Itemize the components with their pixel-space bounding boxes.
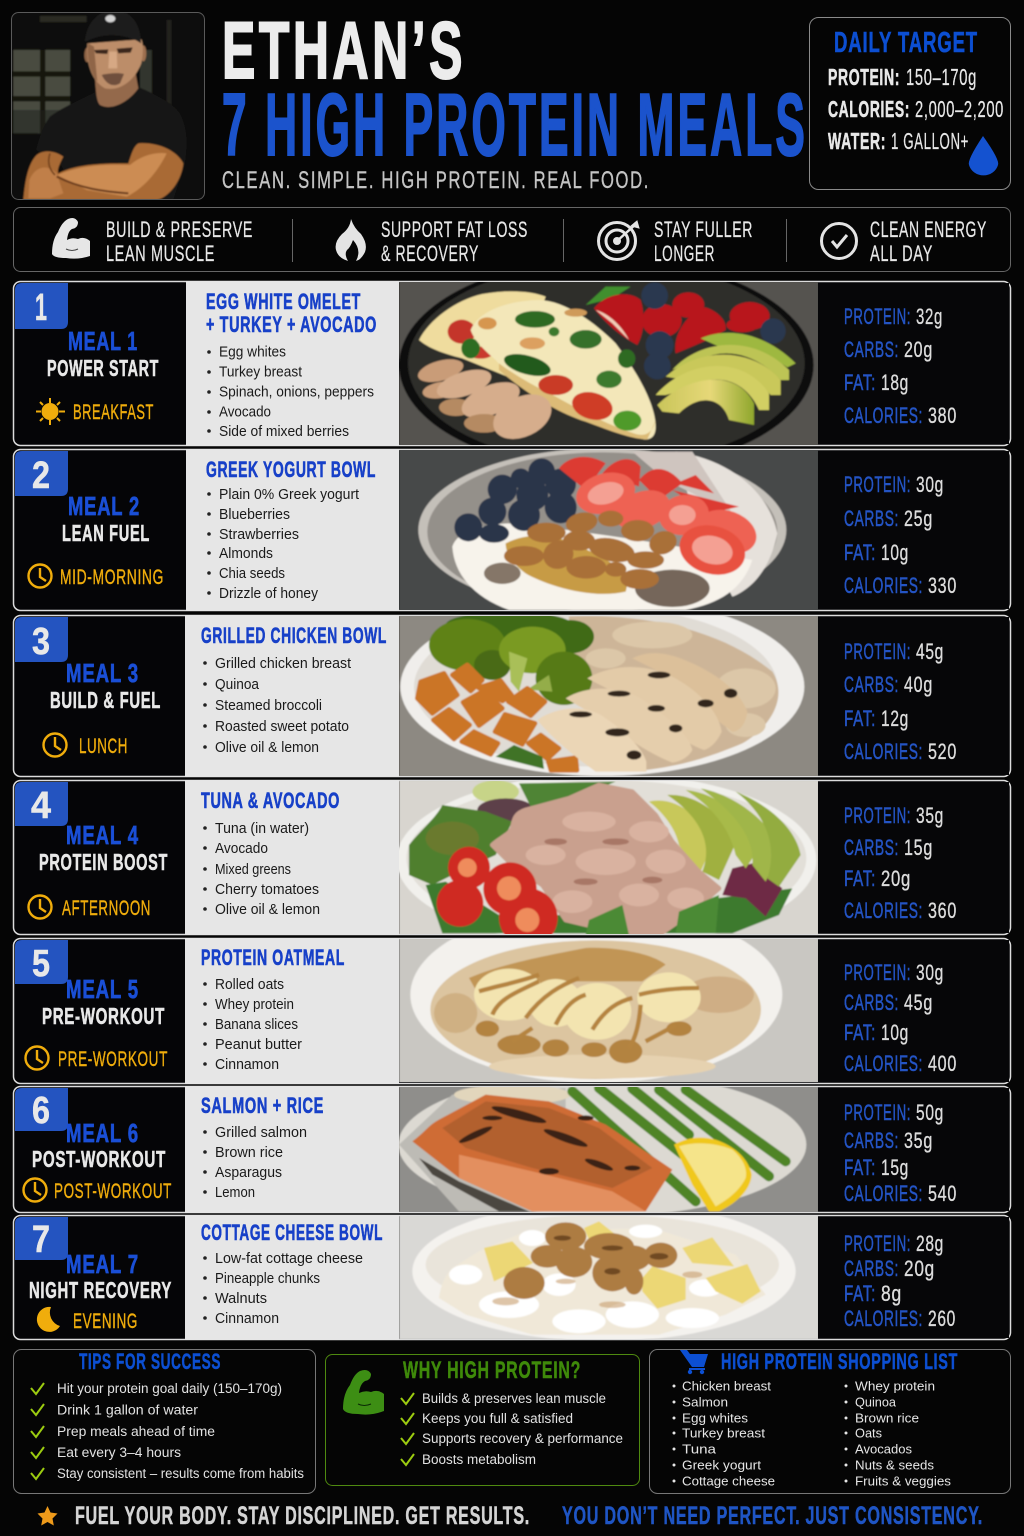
meal 3 macros: 40g	[904, 672, 933, 697]
meal 4 dish text: TUNA & AVOCADO	[201, 788, 340, 813]
benefit: muscle text: LEAN MUSCLE	[106, 241, 215, 266]
meal 3 dish text	[201, 623, 387, 756]
why checklist: Builds & preserves lean muscle	[422, 1391, 606, 1406]
meal 3 macros: 520	[928, 739, 957, 764]
benefit: fuller text: LONGER	[654, 241, 715, 266]
meal 5 dish text: Whey protein	[215, 997, 294, 1013]
shopping column 2: Quinoa	[855, 1394, 897, 1410]
meal 2 labels: MID-MORNING	[60, 566, 164, 589]
meal 2 macros: 10g	[881, 540, 909, 565]
meal 4 macros: CALORIES:	[844, 898, 923, 923]
meal 1 labels: POWER START	[47, 355, 159, 381]
meal 5 number badge: 5	[32, 943, 50, 985]
meal 3 dish text: GRILLED CHICKEN BOWL	[201, 623, 387, 648]
food photo: chicken bowl	[399, 616, 818, 776]
meal 6 dish text: Brown rice	[215, 1145, 283, 1161]
panel: why high protein	[326, 1354, 640, 1486]
panel: daily target: PROTEIN:	[828, 64, 900, 90]
meal 4 macros	[818, 782, 1009, 933]
meal 2 dish text: Chia seeds	[219, 566, 285, 582]
meal 7 labels: NIGHT RECOVERY	[29, 1277, 172, 1303]
meal 5 labels: PRE-WORKOUT	[58, 1048, 168, 1071]
meal 2 dish text: GREEK YOGURT BOWL	[206, 457, 376, 482]
meal 3 macros: CALORIES:	[844, 739, 923, 764]
meal 3 labels: MEAL 3	[66, 658, 139, 688]
panel: tips for success	[14, 1349, 316, 1494]
meal 7 macros: 260	[928, 1306, 956, 1331]
subtitle: CLEAN. SIMPLE. HIGH PROTEIN. REAL FOOD.	[222, 167, 650, 194]
icon: star	[38, 1506, 58, 1526]
tips checklist: Stay consistent – results come from habits	[57, 1466, 304, 1481]
why checklist: Keeps you full & satisfied	[422, 1411, 573, 1426]
food photo: omelet plate	[399, 282, 818, 445]
meal 6 labels: POST-WORKOUT	[32, 1146, 166, 1172]
meal 2 macros: CARBS:	[844, 506, 899, 531]
meal 3 macros	[818, 617, 1009, 775]
meal 4 dish text: Cherry tomatoes	[215, 882, 319, 898]
meal 7 labels: MEAL 7	[66, 1249, 139, 1279]
meal 4 number badge: 4	[31, 785, 51, 827]
benefit: energy text	[870, 217, 987, 266]
meal 2 macros: 25g	[904, 506, 933, 531]
meal 5 labels	[42, 974, 168, 1071]
meal 1 labels	[47, 326, 159, 424]
meal 4 labels	[39, 820, 168, 920]
meal 5 dish text: PROTEIN OATMEAL	[201, 945, 345, 970]
meal 7 macros: 28g	[916, 1231, 944, 1256]
meal 5 labels: MEAL 5	[66, 974, 139, 1004]
panel: meal 1	[12, 280, 1012, 446]
panel: daily target: 150–170g	[906, 64, 977, 90]
food photo: yogurt bowl	[399, 448, 819, 613]
meal 3 labels: BUILD & FUEL	[50, 687, 161, 713]
photo: Ethan portrait	[11, 11, 205, 200]
meal 1 macros: PROTEIN:	[844, 304, 911, 329]
shopping column 1	[672, 1378, 775, 1488]
shopping column 1: Cottage cheese	[682, 1474, 775, 1488]
meal 5 dish text: Rolled oats	[215, 977, 284, 993]
shopping column 2: Whey protein	[855, 1378, 935, 1394]
meal 3 labels	[50, 658, 161, 758]
meal 1 macros: 32g	[916, 304, 943, 329]
meal 1 dish text: + TURKEY + AVOCADO	[206, 312, 377, 337]
meal 7 macros: PROTEIN:	[844, 1231, 911, 1256]
icon: flame	[336, 219, 366, 261]
panel: meal 4	[14, 773, 1010, 947]
panel: daily target: 1 GALLON+	[891, 128, 969, 154]
title: Ethan's: ETHAN’S	[222, 6, 466, 96]
meal 4 dish text: Tuna (in water)	[215, 821, 309, 837]
meal 1 macros: CALORIES:	[844, 403, 923, 428]
meal 4 macros: PROTEIN:	[844, 803, 911, 828]
meal 7 macros: FAT:	[844, 1281, 876, 1306]
shopping column 1: Egg whites	[682, 1410, 749, 1426]
meal 5 macros: 45g	[904, 990, 933, 1015]
icon: clock	[44, 734, 66, 756]
panel: why high protein: WHY HIGH PROTEIN?	[403, 1357, 581, 1384]
meal 6 dish text: Grilled salmon	[215, 1125, 307, 1141]
meal 7 macros: 20g	[904, 1256, 935, 1281]
shopping column 1: Salmon	[682, 1394, 728, 1410]
meal 2 labels: LEAN FUEL	[62, 520, 150, 546]
meal 5 number badge	[15, 940, 68, 985]
meal 2 macros: PROTEIN:	[844, 472, 911, 497]
shopping column 1: Chicken breast	[682, 1378, 771, 1394]
meal 4 dish text	[201, 788, 340, 918]
meal 2 macros: 330	[928, 573, 957, 598]
meal 2 labels: MEAL 2	[68, 491, 140, 521]
shopping column 2: Nuts & seeds	[855, 1458, 934, 1472]
meal 7 macros	[818, 1217, 1009, 1338]
meal 4 labels: AFTERNOON	[62, 897, 151, 920]
meal 7 dish text: Pineapple chunks	[215, 1271, 320, 1287]
shopping column 1: Tuna	[682, 1442, 717, 1456]
meal 3 dish text: Olive oil & lemon	[215, 740, 319, 756]
meal 5 labels: PRE-WORKOUT	[42, 1003, 165, 1029]
meal 7 macros: 8g	[881, 1281, 902, 1306]
panel: benefits strip	[14, 208, 1010, 272]
icon: clock	[28, 564, 52, 588]
meal 7 labels: EVENING	[73, 1310, 138, 1333]
meal 2 macros	[818, 451, 1009, 609]
panel: meal 6	[12, 1086, 1012, 1214]
icon: water drop	[969, 136, 998, 175]
tips checklist	[31, 1381, 304, 1481]
meal 6 macros	[818, 1088, 1009, 1211]
meal 4 macros: 20g	[881, 866, 911, 891]
meal 1 dish text: Turkey breast	[219, 364, 302, 380]
meal 7 number badge	[15, 1217, 68, 1261]
panel: meal 5	[12, 938, 1012, 1084]
shopping column 1: Greek yogurt	[682, 1458, 761, 1472]
meal 3 number badge	[15, 617, 68, 663]
icon: sun	[36, 398, 65, 425]
meal 4 labels: MEAL 4	[66, 820, 139, 850]
meal 6 number badge: 6	[32, 1090, 50, 1132]
panel: daily target: WATER:	[828, 128, 886, 154]
icon: moon	[37, 1307, 60, 1332]
meal 4 macros: CARBS:	[844, 835, 899, 860]
meal 6 labels	[32, 1118, 172, 1203]
benefit: fuller text: STAY FULLER	[654, 217, 753, 242]
icon: check circle	[822, 224, 856, 258]
meal 4 labels: PROTEIN BOOST	[39, 849, 168, 875]
meal 3 dish text: Roasted sweet potato	[215, 719, 349, 735]
meal 1 labels: MEAL 1	[68, 326, 138, 356]
meal 1 macros: CARBS:	[844, 337, 899, 362]
food photo: tuna avocado bowl	[399, 781, 818, 934]
divider	[292, 219, 293, 262]
shopping column 2: Brown rice	[855, 1410, 919, 1426]
benefit: fat loss text: SUPPORT FAT LOSS	[381, 217, 528, 242]
panel: meal 2	[14, 448, 1010, 613]
meal 1 dish text	[206, 289, 377, 440]
meal 1 macros: FAT:	[844, 370, 876, 395]
food photo: salmon plate	[399, 1087, 818, 1212]
benefit: muscle text	[106, 217, 253, 266]
panel: daily target: CALORIES:	[828, 96, 910, 122]
meal 5 dish text: Peanut butter	[215, 1037, 302, 1053]
meal 4 macros: 35g	[916, 803, 944, 828]
tips checklist: Eat every 3–4 hours	[57, 1445, 181, 1460]
meal 5 dish text	[201, 945, 345, 1073]
benefit: fuller text	[654, 217, 753, 266]
meal 4 number badge	[15, 782, 68, 827]
meal 5 dish text: Cinnamon	[215, 1057, 279, 1073]
meal 1 dish text: Side of mixed berries	[219, 424, 349, 440]
meal 6 dish text: Lemon	[215, 1185, 255, 1201]
shopping column 2: Oats	[855, 1426, 882, 1440]
divider	[786, 219, 787, 262]
meal 1 macros: 380	[928, 403, 957, 428]
meal 1 labels: BREAKFAST	[73, 401, 154, 424]
meal 3 macros: 12g	[881, 706, 909, 731]
panel: meal 3	[14, 597, 1010, 778]
icon: target	[598, 221, 639, 260]
shopping column 2: Avocados	[855, 1442, 912, 1456]
food photo: oatmeal bowl	[399, 939, 818, 1082]
panel: tips for success: TIPS FOR SUCCESS	[79, 1349, 221, 1374]
meal 6 dish text	[201, 1093, 324, 1201]
meal 4 macros: FAT:	[844, 866, 876, 891]
meal 4 dish text: Avocado	[215, 841, 268, 857]
meal 5 macros	[818, 940, 1009, 1082]
benefit: energy text: ALL DAY	[870, 241, 933, 266]
meal 3 dish text: Quinoa	[215, 677, 260, 693]
meal 1 number badge	[15, 283, 68, 329]
meal 7 macros: CALORIES:	[844, 1306, 923, 1331]
meal 1 dish text: Avocado	[219, 404, 271, 420]
meal 6 macros: CALORIES:	[844, 1181, 923, 1206]
why checklist: Supports recovery & performance	[422, 1431, 623, 1446]
icon: shopping cart	[680, 1350, 708, 1374]
icon: green flexed arm	[343, 1370, 384, 1415]
why checklist: Boosts metabolism	[422, 1452, 536, 1467]
meal 3 macros: CARBS:	[844, 672, 899, 697]
food photo: cottage cheese bowl	[399, 1216, 818, 1339]
why checklist	[401, 1391, 623, 1467]
meal 5 dish text: Banana slices	[215, 1017, 298, 1033]
meal 2 macros: FAT:	[844, 540, 876, 565]
meal 5 macros: FAT:	[844, 1020, 876, 1045]
meal 2 number badge: 2	[32, 455, 50, 497]
meal 5 macros: 10g	[881, 1020, 909, 1045]
meal 2 dish text: Blueberries	[219, 507, 290, 523]
benefit: muscle text: BUILD & PRESERVE	[106, 217, 253, 242]
meal 4 dish text: Olive oil & lemon	[215, 902, 320, 918]
icon: clock	[24, 1178, 46, 1202]
benefit: fat loss text: & RECOVERY	[381, 241, 479, 266]
meal 6 macros: PROTEIN:	[844, 1100, 911, 1125]
meal 5 macros: 400	[928, 1051, 957, 1076]
meal 5 macros: PROTEIN:	[844, 960, 911, 985]
meal 6 macros: FAT:	[844, 1155, 876, 1180]
meal 3 dish text: Grilled chicken breast	[215, 656, 351, 672]
meal 6 macros: 35g	[904, 1128, 933, 1153]
meal 5 macros: 30g	[916, 960, 944, 985]
meal 2 dish text: Almonds	[219, 546, 273, 562]
meal 7 macros: CARBS:	[844, 1256, 899, 1281]
meal 6 dish text: Asparagus	[215, 1165, 282, 1181]
meal 6 number badge	[15, 1088, 68, 1132]
panel: shopping list	[650, 1349, 1010, 1494]
meal 5 macros: CARBS:	[844, 990, 899, 1015]
meal 6 macros: 15g	[881, 1155, 909, 1180]
meal 7 dish text: Cinnamon	[215, 1311, 279, 1327]
meal 7 dish text	[201, 1220, 383, 1327]
meal 1 dish text: Spinach, onions, peppers	[219, 384, 374, 400]
meal 3 macros: PROTEIN:	[844, 639, 911, 664]
meal 3 labels: LUNCH	[79, 735, 128, 758]
meal 2 number badge	[15, 451, 68, 497]
meal 4 macros: 360	[928, 898, 957, 923]
meal 1 dish text: Egg whites	[219, 344, 286, 360]
divider	[563, 219, 564, 262]
shopping column 1: Turkey breast	[682, 1426, 765, 1440]
meal 2 macros: CALORIES:	[844, 573, 923, 598]
shopping column 2: Fruits & veggies	[855, 1474, 952, 1488]
meal 7 dish text: Low-fat cottage cheese	[215, 1251, 363, 1267]
meal 6 labels: POST-WORKOUT	[54, 1180, 172, 1203]
meal 1 macros: 20g	[904, 337, 933, 362]
icon: clock	[28, 896, 52, 918]
benefit: fat loss text	[381, 217, 528, 266]
meal 4 dish text: Mixed greens	[215, 862, 291, 878]
icon: clock	[26, 1046, 48, 1070]
meal 2 dish text	[206, 457, 376, 602]
meal 6 macros: CARBS:	[844, 1128, 899, 1153]
meal 6 macros: 540	[928, 1181, 957, 1206]
meal 7 labels	[29, 1249, 172, 1333]
meal 1 macros: 18g	[881, 370, 909, 395]
tips checklist: Drink 1 gallon of water	[57, 1402, 199, 1418]
meal 1 macros	[818, 283, 1009, 444]
meal 7 dish text: COTTAGE CHEESE BOWL	[201, 1220, 383, 1245]
tips checklist: Hit your protein goal daily (150–170g)	[57, 1381, 282, 1396]
meal 2 dish text: Drizzle of honey	[219, 586, 319, 602]
meal 6 labels: MEAL 6	[66, 1118, 139, 1148]
meal 3 macros: FAT:	[844, 706, 876, 731]
meal 3 dish text: Steamed broccoli	[215, 698, 322, 714]
meal 6 dish text: SALMON + RICE	[201, 1093, 324, 1118]
panel: daily target	[810, 18, 1010, 190]
meal 6 macros: 50g	[916, 1100, 944, 1125]
meal 2 labels	[60, 491, 164, 589]
meal 1 dish text: EGG WHITE OMELET	[206, 289, 361, 314]
meal 1 number badge: 1	[35, 287, 47, 329]
panel: meal 7	[14, 1201, 1010, 1341]
tips checklist: Prep meals ahead of time	[57, 1424, 215, 1439]
meal 3 macros: 45g	[916, 639, 944, 664]
shopping column 2	[844, 1378, 952, 1488]
meal 2 macros: 30g	[916, 472, 944, 497]
meal 7 number badge: 7	[32, 1219, 50, 1261]
meal 3 number badge: 3	[32, 621, 50, 663]
meal 4 macros: 15g	[904, 835, 933, 860]
icon: flexed arm	[52, 218, 90, 259]
meal 5 macros: CALORIES:	[844, 1051, 923, 1076]
meal 2 dish text: Strawberries	[219, 527, 299, 543]
footer slogan: FUEL YOUR BODY. STAY DISCIPLINED. GET RESULTS.	[75, 1502, 530, 1530]
meal 2 dish text: Plain 0% Greek yogurt	[219, 487, 359, 503]
meal 7 dish text: Walnuts	[215, 1291, 267, 1307]
